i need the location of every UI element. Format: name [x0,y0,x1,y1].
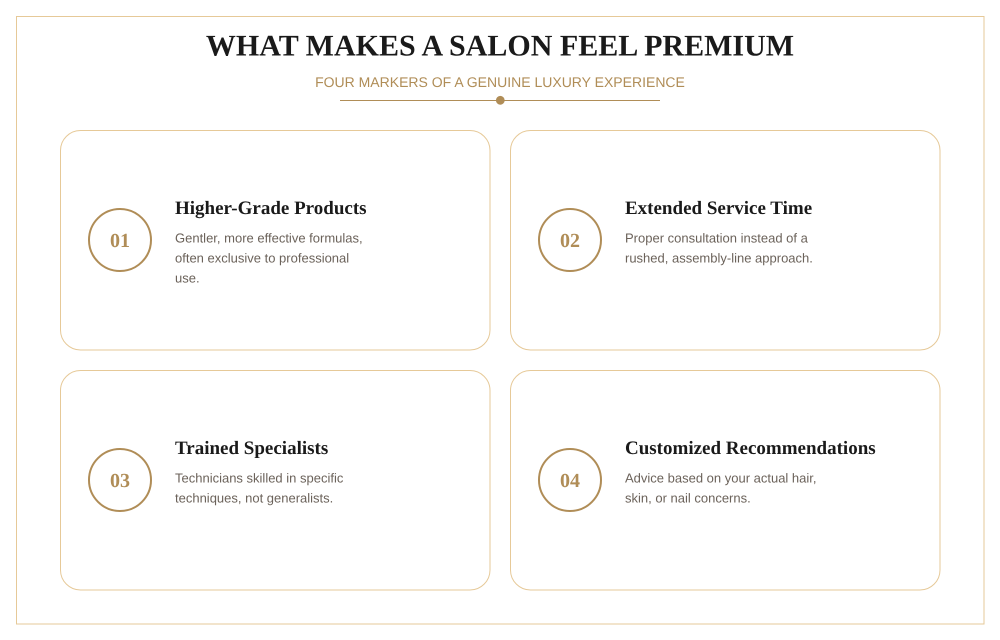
subtitle: FOUR MARKERS OF A GENUINE LUXURY EXPERIENCE [315,74,685,90]
panel: card 01 [60,130,490,350]
heading: Trained Specialists: Trained Specialists [175,438,328,459]
text: description 03: Technicians skilled in specific [175,470,344,486]
panel: card 03 [60,370,490,590]
number badge 04 [539,449,601,511]
heading: Extended Service Time: Extended Service Time [625,198,812,219]
number badge 01: 01 [110,230,130,252]
text: description 03 [175,470,344,506]
text: description 02: rushed, assembly-line approach. [625,250,813,266]
text: description 04: Advice based on your actual hair, [625,470,817,486]
text: description 01: Gentler, more effective formulas, [175,230,363,246]
number badge 03: 03 [110,470,130,492]
number badge 02 [539,209,601,271]
text: description 03: techniques, not generalists. [175,490,333,506]
panel: card 02 [510,130,940,350]
text: description 04 [625,470,817,506]
text: description 02 [625,230,813,266]
text: description 02: Proper consultation instead of a [625,230,809,246]
text: description 01: use. [175,270,200,286]
panel: card 04 [510,370,940,590]
text: description 01 [175,230,363,286]
text: description 01: often exclusive to professional [175,250,349,266]
number badge 03 [89,449,151,511]
number badge 04: 04 [560,470,580,492]
number badge 02: 02 [560,230,580,252]
heading: Higher-Grade Products: Higher-Grade Products [175,198,367,219]
heading: Customized Recommendations: Customized Recommendations [625,438,876,459]
number badge 01 [89,209,151,271]
text: description 04: skin, or nail concerns. [625,490,751,506]
title divider with dot [340,96,660,105]
title: WHAT MAKES A SALON FEEL PREMIUM [206,30,794,62]
